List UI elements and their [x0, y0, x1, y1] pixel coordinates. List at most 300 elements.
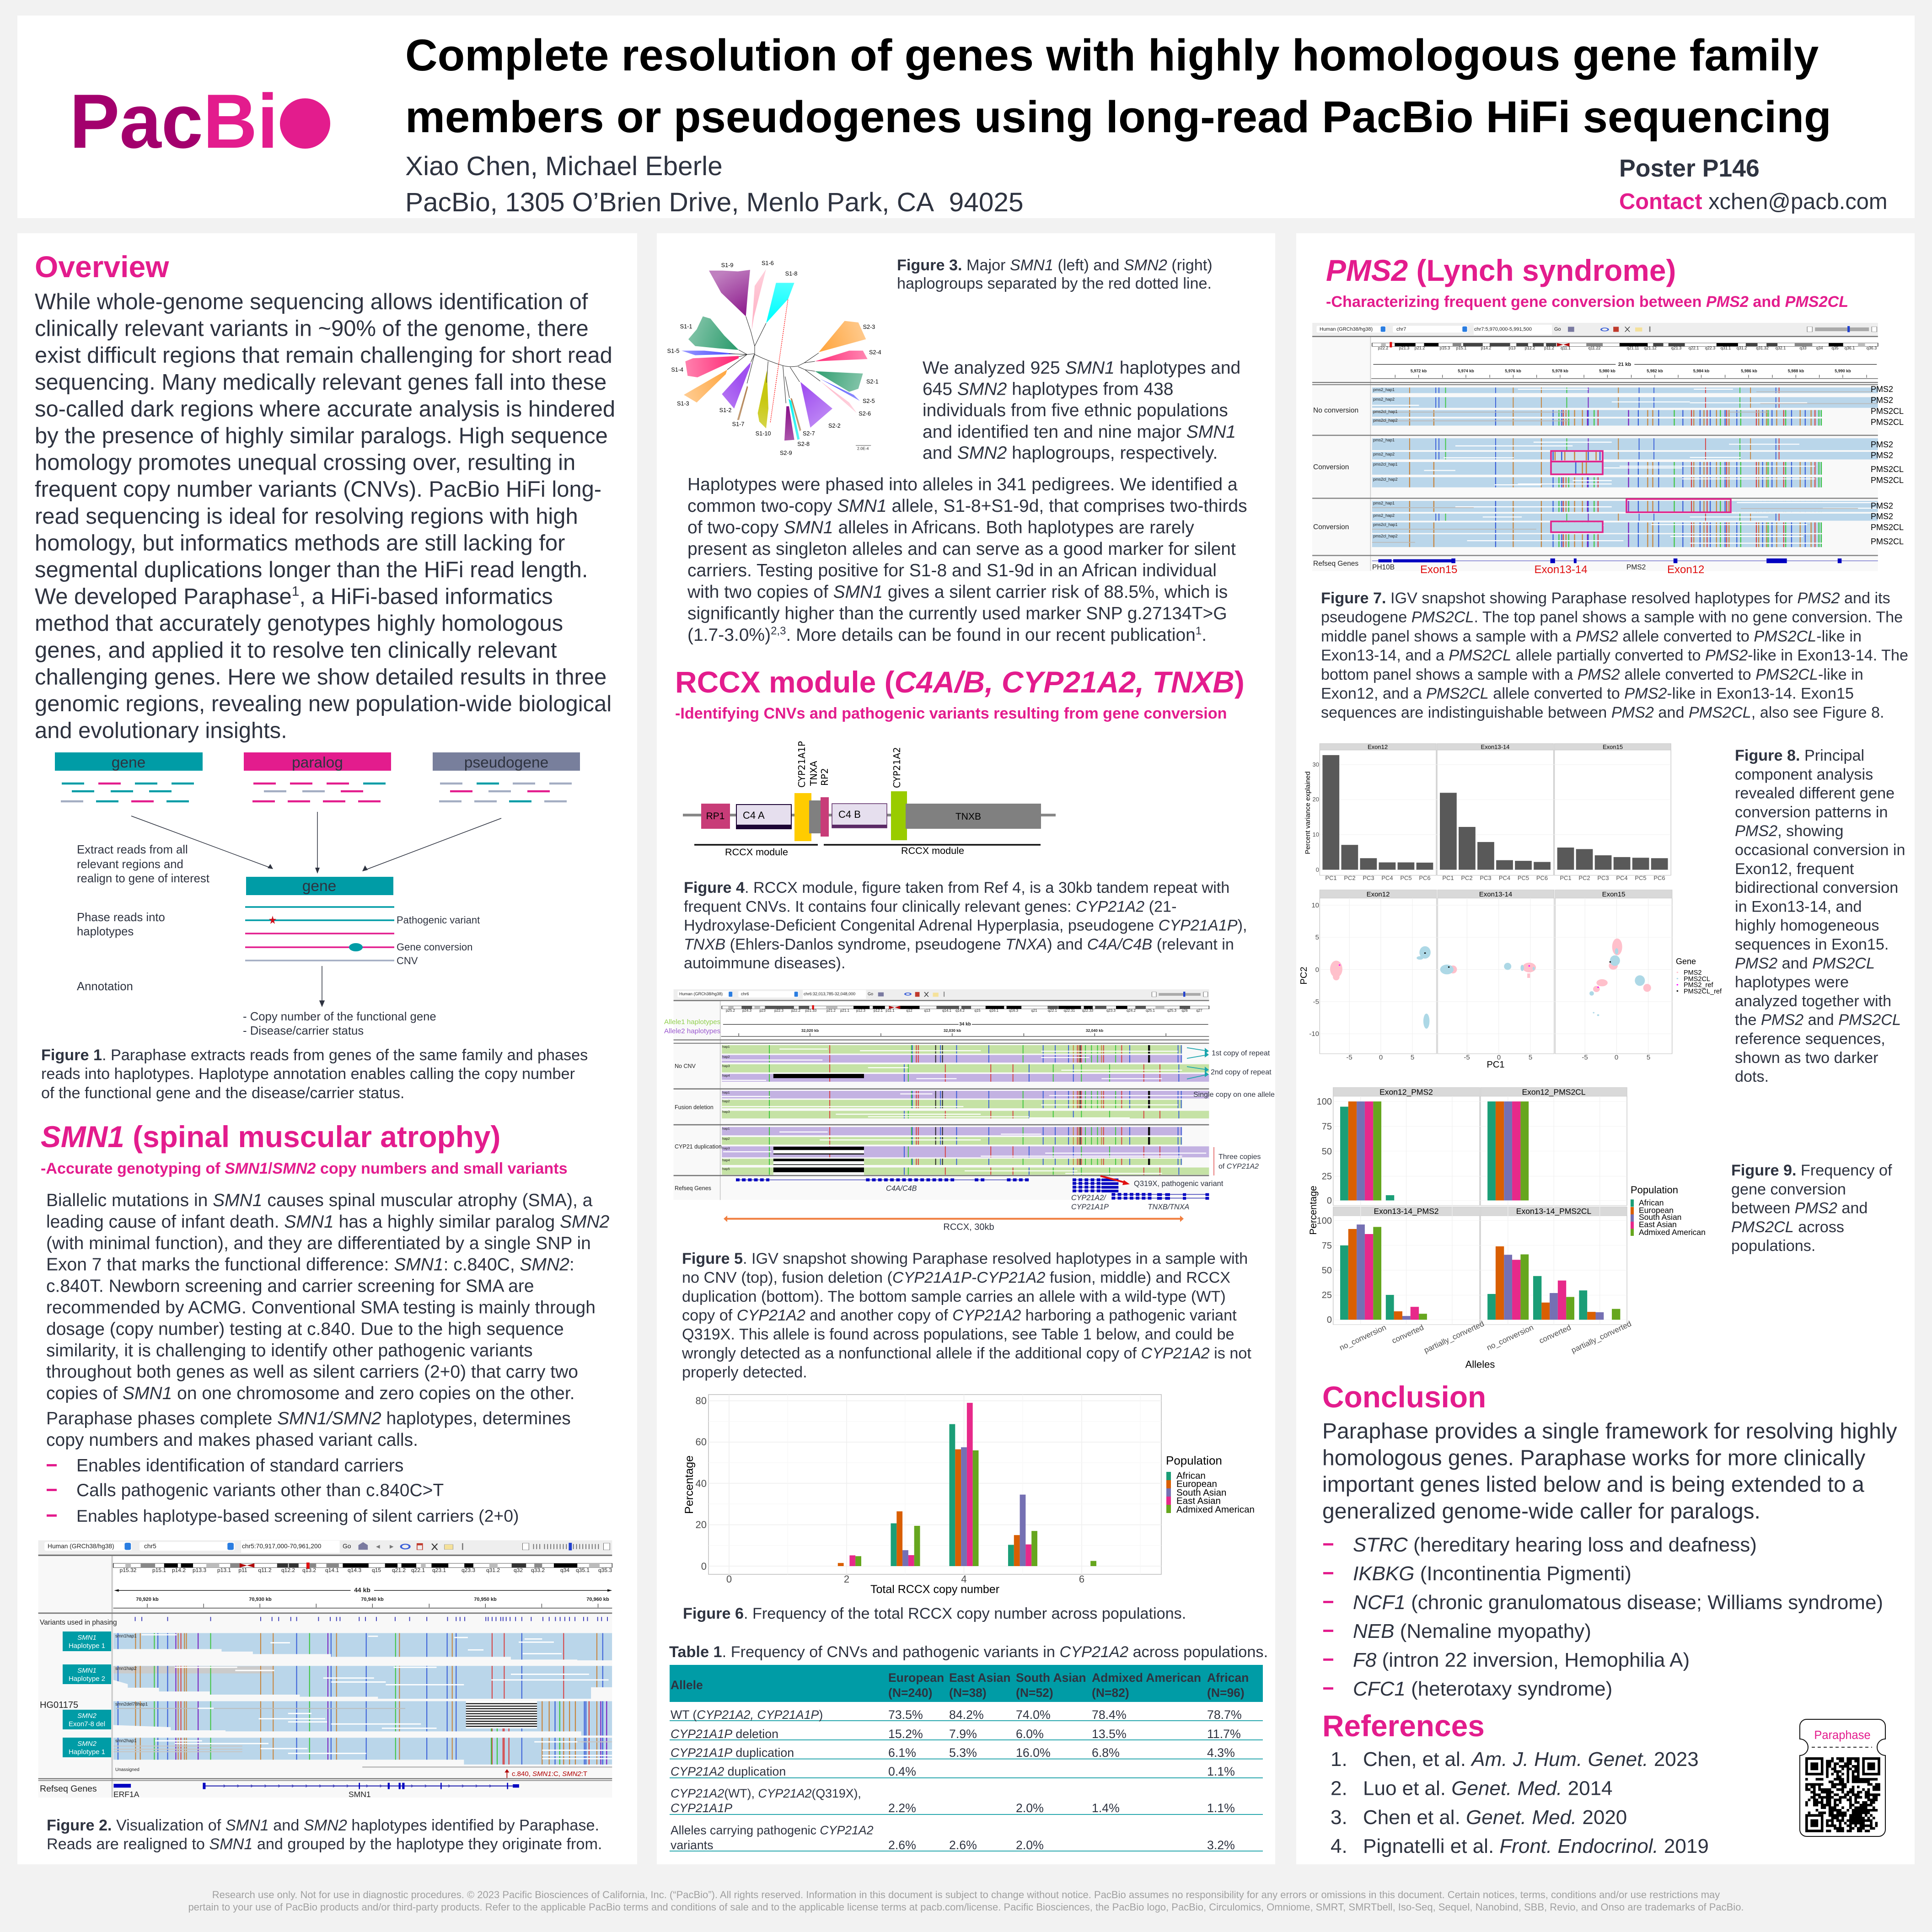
- IGV labels: pms2_hap2: [1373, 452, 1395, 456]
- figure 8 caption: the PMS2 and PMS2CL: [1735, 1011, 1901, 1029]
- text: overview: sequencing. Many medically relevant genes fall into these: [35, 370, 606, 395]
- IGV labels: 32,040 kb: [1086, 1028, 1103, 1033]
- IGV labels: 70,930 kb: [249, 1597, 272, 1602]
- legend: South Asian: [1176, 1487, 1226, 1498]
- PCA axis labels: -10: [1309, 1030, 1319, 1038]
- y tick labels: 25: [1322, 1290, 1332, 1300]
- figure 8 caption: conversion patterns in: [1735, 804, 1888, 821]
- icon: star pathogenic variant: [269, 916, 276, 924]
- bottom right bars: [1487, 1246, 1620, 1320]
- IGV labels: q31.1: [1721, 346, 1731, 350]
- variance axis labels: PC2: [1578, 875, 1590, 881]
- panel: middle column: [657, 233, 1275, 1864]
- figure 8 caption: Figure 8. Principal: [1735, 747, 1864, 764]
- top left bars: [1340, 1101, 1394, 1201]
- IGV labels: chr5: [144, 1543, 156, 1550]
- text: haplotypes analyzed: 645 SMN2 haplotypes from 438: [923, 380, 1173, 399]
- figure 8: principal component analysis: 0: [1379, 1054, 1383, 1061]
- IGV labels: No CNV: [675, 1063, 696, 1069]
- annotation arrows: [724, 1048, 1214, 1222]
- sample tags: SMN2: [77, 1712, 97, 1720]
- figure 8 caption: sequences in Exon15.: [1735, 936, 1889, 953]
- x tick labels: converted: [1390, 1323, 1425, 1345]
- table 1 caption: Table 1. Frequency of CNVs and pathogenic variants in CYP21A2 across populations.: [669, 1643, 1268, 1661]
- x tick labels: partially_converted: [1570, 1319, 1633, 1355]
- subheading: PMS2: -Characterizing frequent gene conversion between PMS2 and PMS2CL: [1326, 293, 1848, 311]
- table rows: 1.4%: [1092, 1801, 1120, 1815]
- tree labels: S2-2: [828, 423, 841, 429]
- figure 8: principal component analysis: -5: [1346, 1054, 1352, 1061]
- gene: RP1: [701, 804, 730, 829]
- heading: References: References: [1322, 1709, 1485, 1743]
- IGV labels: hap5: [722, 1167, 730, 1171]
- figure 6: RCCX copy number bar chart: [683, 1395, 1255, 1596]
- text: overview: homology promotes unequal crossing over, resulting in: [35, 451, 575, 475]
- IGV labels: q32: [514, 1567, 523, 1573]
- IGV labels: Human (GRCh38/hg38): [48, 1543, 114, 1550]
- IGV labels: p15.3: [1440, 346, 1450, 350]
- IGV labels: q23.1: [432, 1567, 446, 1573]
- IGV labels: C4A/C4B: [886, 1185, 917, 1193]
- IGV labels: 5,988 kb: [1788, 369, 1804, 373]
- subheading: RCCX: -Identifying CNVs and pathogenic variants resulting from gene conversion: [675, 705, 1227, 722]
- IGV labels: pms2cl_hap1: [1373, 409, 1398, 414]
- text: SMN1 body: Paraphase phases complete SMN1/SMN2 haplotypes, determines: [46, 1409, 571, 1428]
- IGV labels: q21.3: [1671, 346, 1681, 350]
- legend: Admixed American: [1176, 1504, 1255, 1515]
- IGV labels: p11.1: [886, 1009, 895, 1013]
- text: phased alleles: (1.7-3.0%): [687, 625, 1207, 645]
- QR ticket: Paraphase: Paraphase: [1814, 1729, 1871, 1742]
- gene box realigned: [246, 877, 393, 895]
- IGV labels: q11.22: [1589, 346, 1600, 350]
- legend: gene: [1676, 957, 1722, 995]
- IGV labels: q14.1: [942, 1009, 952, 1013]
- QR ticket: Paraphase: [1800, 1719, 1885, 1836]
- sample tags: SMN1: [77, 1667, 97, 1674]
- figure 8 caption: dots.: [1735, 1068, 1769, 1085]
- IGV labels: Variants used in phasing: [40, 1619, 117, 1626]
- table rows: CYP21A2(WT), CYP21A2(Q319X),: [671, 1787, 861, 1800]
- bars: [838, 1403, 1096, 1566]
- IGV labels: q22.1: [1048, 1009, 1057, 1013]
- IGV labels: q22.1: [1689, 346, 1699, 350]
- figure 5 caption: properly detected.: [682, 1363, 807, 1381]
- table rows: 0.4%: [888, 1765, 916, 1778]
- table rows: 1.1%: [1207, 1765, 1235, 1778]
- x tick labels: [1338, 1319, 1633, 1355]
- tree labels: S2-3: [863, 324, 875, 330]
- IGV labels: p22.3: [774, 1009, 784, 1013]
- figure 8 caption: PMS2, showing: [1735, 822, 1844, 840]
- table rows: 13.5%: [1092, 1727, 1127, 1741]
- gene box realigned: gene: [302, 878, 336, 895]
- IGV labels: p12.3: [856, 1009, 866, 1013]
- IGV labels: q25.1: [1146, 1009, 1155, 1013]
- IGV labels: q22.3: [1705, 346, 1715, 350]
- figure 8 caption: PMS2 and PMS2CL: [1735, 955, 1875, 972]
- variance axis labels: PC5: [1518, 875, 1529, 881]
- figure 4 caption: Figure 4. RCCX module, figure taken from Ref 4, is a 30kb tandem repeat with: [684, 879, 1229, 896]
- IGV labels: q32.1: [1776, 346, 1786, 350]
- PCA axis labels: -5: [1313, 998, 1319, 1006]
- gene: C4 B: [832, 804, 887, 828]
- axis ticks: 60: [696, 1436, 707, 1448]
- IGV labels: p13.1: [217, 1567, 231, 1573]
- figure 8: principal component analysis: Exon12: [1367, 891, 1390, 898]
- IGV labels: [1313, 327, 1904, 576]
- figure 7 caption: sequences are indistinguishable between PMS2 and PMS2CL, also see Figure 8.: [1321, 704, 1884, 721]
- text: references: Pignatelli et al. Front. Endocrinol. 2019: [1363, 1835, 1709, 1857]
- variance axis labels: PC4: [1499, 875, 1510, 881]
- arrows to gene: [131, 812, 501, 874]
- variance axis labels: PC1: [1560, 875, 1572, 881]
- IGV labels: 70,920 kb: [136, 1597, 159, 1602]
- text: conclusion: homologous genes. Paraphase works for more clinically: [1322, 1446, 1865, 1470]
- table rows: 78.7%: [1207, 1708, 1242, 1722]
- text: references: 2.: [1331, 1777, 1347, 1799]
- figure 9 caption: PMS2CL across: [1731, 1218, 1844, 1236]
- module labels: RCCX module: [901, 845, 964, 856]
- tree labels: S1-10: [756, 430, 771, 437]
- variance axis labels: PC2: [1461, 875, 1473, 881]
- text: SMN1 body: copy numbers and makes phased variant calls.: [46, 1430, 418, 1450]
- scale bar: 2.0E-4: [857, 446, 869, 451]
- IGV labels: q21.11: [1627, 346, 1639, 350]
- module labels: RCCX module: [725, 846, 788, 858]
- CYP21 duplication reads: [722, 1127, 1182, 1135]
- legend: population: Admixed American: [1639, 1228, 1706, 1237]
- gene: CYP21A2: [891, 791, 907, 840]
- IGV labels: TNXB/TNXA: [1148, 1203, 1189, 1211]
- IGV labels: q26: [1181, 1009, 1188, 1013]
- figure 5: IGV snapshot RCCX: [664, 989, 1275, 1232]
- legend: East Asian: [1176, 1496, 1221, 1506]
- bullets: SMN1: [47, 1456, 519, 1525]
- text: phased alleles: Haplotypes were phased into alleles in 341 pedigrees. We identified a: [687, 475, 1238, 494]
- IGV labels: Allele2 haplotypes: [664, 1027, 721, 1035]
- IGV labels: q23.3: [462, 1567, 475, 1573]
- step labels: realign to gene of interest: [77, 872, 209, 885]
- IGV labels: Unassigned: [115, 1767, 140, 1772]
- step labels: Annotation: [77, 980, 133, 993]
- tree labels: S1-7: [732, 421, 744, 427]
- authors and address: PacBio, 1305 O’Brien Drive, Menlo Park, CA 94025: [405, 188, 1024, 217]
- strip labels: Exon13-14_PMS2CL: [1516, 1207, 1591, 1216]
- IGV labels: 5,978 kb: [1552, 369, 1568, 373]
- table rows: [670, 1708, 1263, 1852]
- y tick labels: 0: [1327, 1196, 1332, 1206]
- text: references: Chen, et al. Am. J. Hum. Genet. 2023: [1363, 1748, 1699, 1771]
- IGV labels: pms2cl_hap2: [1373, 534, 1398, 538]
- IGV labels: p21.3: [1399, 346, 1409, 350]
- table rows: 3.2%: [1207, 1838, 1235, 1852]
- x tick labels: partially_converted: [1422, 1319, 1486, 1355]
- IGV labels: of CYP21A2: [1218, 1163, 1259, 1170]
- y tick labels: 0: [1327, 1315, 1332, 1325]
- figure 8: principal component analysis: 10: [1313, 831, 1319, 838]
- conversion highlight boxes: [1551, 451, 1731, 532]
- IGV labels: q12: [906, 1009, 912, 1013]
- icon: gene conversion dot: [349, 943, 363, 951]
- table rows: 2.6%: [888, 1838, 916, 1852]
- figure 8: principal component analysis: 0: [1615, 1054, 1618, 1061]
- figure 8 caption: haplotypes were: [1735, 974, 1849, 991]
- IGV labels: Single copy on one allele: [1193, 1091, 1275, 1099]
- text: overview: genes, and applied it to resolve ten clinically relevant: [35, 638, 557, 663]
- text: SMN1 body: Exon 7 that marks the functional difference: SMN1: c.840C, SMN2:: [46, 1255, 574, 1275]
- text: overview: homology, but informatics methods are still lacking for: [35, 531, 565, 555]
- x tick labels: no_conversion: [1485, 1323, 1535, 1352]
- text: haplotypes analyzed: and identified ten and nine major SMN1: [923, 422, 1236, 442]
- gene box: [55, 752, 203, 771]
- IGV labels: p23: [759, 1009, 766, 1013]
- step labels: haplotypes: [77, 925, 134, 938]
- figure 5 caption: Figure 5. IGV snapshot showing Paraphase resolved haplotypes in a sample with: [682, 1250, 1248, 1267]
- strip labels: Exon12_PMS2: [1379, 1088, 1433, 1097]
- IGV labels: p21.1: [840, 1009, 850, 1013]
- figure 8: principal component analysis: 5: [1647, 1054, 1650, 1061]
- IGV labels: [40, 1543, 612, 1799]
- IGV labels: smn2hap1: [115, 1739, 137, 1744]
- IGV labels: Refseq Genes: [1313, 560, 1358, 568]
- IGV labels: RCCX, 30kb: [943, 1222, 994, 1232]
- group 1: [1372, 387, 1878, 393]
- bullets: genes: NCF1 (chronic granulomatous disease; Williams syndrome): [1353, 1591, 1883, 1614]
- gene: RP1: RP1: [706, 811, 724, 821]
- figure 2 caption: Figure 2. Visualization of SMN1 and SMN2 haplotypes identified by Paraphase.: [47, 1817, 599, 1834]
- gene: RP2: [821, 797, 829, 837]
- IGV labels: p11.2: [1544, 346, 1554, 350]
- table rows: 73.5%: [888, 1708, 923, 1722]
- variance axis labels: PC3: [1597, 875, 1609, 881]
- IGV labels: q33: [1799, 346, 1807, 350]
- axis ticks: 0: [701, 1561, 707, 1572]
- bullets: genes: CFC1 (heterotaxy syndrome): [1353, 1678, 1612, 1700]
- IGV labels: PMS2: [1871, 501, 1893, 510]
- IGV labels: p22.2: [1378, 346, 1388, 350]
- IGV labels: Allele1 haplotypes: [664, 1018, 721, 1026]
- IGV labels: PH10B: [1372, 564, 1395, 571]
- text: SMN1 body: throughout both genes as well as silent carriers (2+0) that carry two: [46, 1362, 578, 1382]
- IGV labels: ERF1A: [113, 1790, 140, 1799]
- legend: population: South Asian: [1639, 1213, 1681, 1222]
- text: references: Luo et al. Genet. Med. 2014: [1363, 1777, 1613, 1799]
- legend: gene: PMS2CL_ref: [1684, 988, 1722, 995]
- tree labels: S2-7: [803, 430, 815, 437]
- figure 7 caption: Figure 7. IGV snapshot showing Paraphase resolved haplotypes for PMS2 and its: [1321, 590, 1890, 607]
- rotated gene labels: RP2: [819, 768, 830, 786]
- subheading: SMN1: -Accurate genotyping of SMN1/SMN2 copy numbers and small variants: [41, 1160, 568, 1177]
- text: SMN1 body: (with minimal function), and they are differentiated by a single SNP in: [46, 1234, 591, 1253]
- figure 2: IGV snapshot SMN1 SMN2: [38, 1540, 612, 1799]
- IGV labels: Go: [1554, 327, 1561, 332]
- IGV labels: 5,986 kb: [1741, 369, 1757, 373]
- logo: PacBio: PacBi: [70, 78, 278, 164]
- IGV labels: p11: [238, 1567, 247, 1573]
- IGV labels: 34 kb: [959, 1022, 971, 1027]
- figure 7: IGV snapshot PMS2: [1312, 323, 1904, 576]
- figure 7 caption: Exon13-14, and a PMS2CL allele partially converted to PMS2-like in Exon13-14. The: [1321, 647, 1908, 664]
- IGV labels: 2nd copy of repeat: [1211, 1068, 1272, 1076]
- figure 4: RCCX module diagram: [683, 741, 1056, 858]
- heading: PMS2: PMS2 (Lynch syndrome): [1326, 253, 1676, 287]
- figure 3 caption: Figure 3. Major SMN1 (left) and SMN2 (right): [897, 257, 1213, 274]
- gene: C4 B: C4 B: [838, 809, 861, 820]
- genes: [736, 1180, 1209, 1198]
- IGV labels: p14.2: [172, 1567, 186, 1573]
- IGV labels: q31.32: [1756, 346, 1769, 350]
- text: references: Chen et al. Genet. Med. 2020: [1363, 1806, 1627, 1829]
- IGV labels: q11.2: [258, 1567, 272, 1573]
- IGV labels: Exon12: [1667, 564, 1704, 576]
- text: SMN1 body: c.840T. Newborn screening and carrier screening for SMA are: [46, 1277, 534, 1296]
- text: references: 3.: [1331, 1806, 1347, 1829]
- y tick labels: 100: [1317, 1216, 1332, 1226]
- IGV labels: q12.2: [281, 1567, 295, 1573]
- tree labels: S2-6: [859, 410, 871, 417]
- step labels: Extract reads from all: [77, 843, 188, 856]
- tree labels: S2-4: [869, 349, 881, 356]
- table header: African: [1207, 1671, 1249, 1685]
- figure 8: principal component analysis: PC1: [1487, 1060, 1504, 1070]
- tree branches: [727, 317, 820, 403]
- IGV labels: smn1hap2: [115, 1666, 137, 1671]
- IGV labels: smn1hap1: [115, 1634, 137, 1639]
- IGV labels: SMN1: [349, 1790, 371, 1799]
- table rows: 11.7%: [1207, 1727, 1241, 1741]
- figure 8 caption: Exon12, frequent: [1735, 860, 1854, 878]
- IGV labels: c.840, SMN1:C, SMN2:T: [512, 1770, 587, 1778]
- figure 9: gene conversion frequency bars: [1308, 1088, 1706, 1370]
- IGV labels: p14.2: [1481, 346, 1491, 350]
- text: phased alleles: common two-copy SMN1 allele, S1-8+S1-9d, that comprises two-thirds: [687, 496, 1247, 516]
- figure 8: principal component analysis: 5: [1529, 1054, 1532, 1061]
- IGV labels: 5,982 kb: [1647, 369, 1663, 373]
- IGV labels: Refseq Genes: [40, 1784, 97, 1794]
- IGV labels: q35: [1831, 346, 1839, 350]
- text: phased alleles: carriers. Testing positive for S1-8 and S1-9d in an African individual: [687, 561, 1217, 580]
- text: overview: segmental duplications longer than the HiFi read length.: [35, 558, 588, 582]
- authors and address: Xiao Chen, Michael Eberle: [405, 151, 723, 181]
- figure 4 caption: autoimmune diseases).: [684, 955, 845, 972]
- variance axis labels: PC5: [1635, 875, 1647, 881]
- heading: Overview: Overview: [35, 250, 169, 284]
- text: overview: genomic regions, revealing new population-wide biological: [35, 692, 612, 716]
- tree labels: S1-5: [667, 348, 679, 354]
- table header: European: [888, 1671, 944, 1685]
- sample tags: SMN2: [77, 1740, 97, 1748]
- figure 8 caption: reference sequences,: [1735, 1030, 1885, 1047]
- panel: left column: [17, 233, 637, 1864]
- legend: European: [1176, 1479, 1217, 1489]
- figure 9 caption: between PMS2 and: [1731, 1200, 1868, 1217]
- IGV labels: hap1: [722, 1045, 730, 1049]
- table rows: 78.4%: [1092, 1708, 1127, 1722]
- IGV labels: q15: [372, 1567, 381, 1573]
- IGV labels: chr5:70,917,000-70,961,200: [242, 1543, 322, 1550]
- variance axis labels: PC6: [1419, 875, 1431, 881]
- sample tags: SMN1: [77, 1634, 97, 1642]
- table header: East Asian: [949, 1671, 1011, 1685]
- IGV labels: q13: [924, 1009, 930, 1013]
- IGV labels: pms2_hap2: [1373, 513, 1395, 518]
- text: overview: method that accurately genotypes highly homologous: [35, 611, 563, 636]
- IGV labels: q14.1: [325, 1567, 339, 1573]
- sample tags: Haplotype 1: [69, 1748, 105, 1756]
- IGV labels: pms2_hap1: [1373, 501, 1395, 505]
- table header: (N=96): [1207, 1686, 1245, 1700]
- sample tags: Haplotype 2: [69, 1675, 105, 1683]
- figure 8: principal component analysis: -5: [1582, 1054, 1588, 1061]
- table rows: 16.0%: [1016, 1746, 1051, 1760]
- IGV labels: PMS2CL: [1871, 465, 1904, 474]
- text: overview: 1: [292, 584, 299, 599]
- paralog box: [244, 752, 391, 771]
- text: overview: and evolutionary insights.: [35, 719, 287, 743]
- IGV labels: q36.1: [1845, 346, 1855, 350]
- gene: C4 A: [736, 805, 791, 829]
- bullets: genes: NEB (Nemaline myopathy): [1353, 1620, 1591, 1642]
- tree labels: S1-3: [677, 401, 689, 407]
- variance axis labels: PC1: [1442, 875, 1454, 881]
- IGV labels: q13.2: [302, 1567, 316, 1573]
- axis ticks: 20: [696, 1519, 707, 1530]
- IGV labels: Human (GRCh38/hg38): [1320, 327, 1373, 332]
- IGV labels: p24.3: [742, 1009, 752, 1013]
- reads: [61, 784, 572, 801]
- figure 8: principal component analysis: Exon15: [1602, 891, 1625, 898]
- table header: (N=52): [1016, 1686, 1053, 1700]
- IGV labels: PMS2CL: [1871, 476, 1904, 485]
- poster number: Poster P146: [1619, 155, 1760, 182]
- module rules: [694, 844, 1041, 846]
- figure 8: principal component analysis: [1299, 744, 1722, 1070]
- bullets: genes: F8 (intron 22 inversion, Hemophilia A): [1353, 1649, 1690, 1671]
- table rows: 6.0%: [1016, 1727, 1044, 1741]
- IGV labels: p21.33: [805, 1009, 817, 1013]
- text: references: 4.: [1331, 1835, 1347, 1857]
- figure 8: principal component analysis: 0: [1316, 866, 1319, 873]
- IGV labels: pms2cl_hap2: [1373, 418, 1398, 423]
- text: overview: frequent copy number variants (CNVs). PacBio HiFi long-: [35, 477, 601, 502]
- IGV labels: CYP21A2/: [1071, 1194, 1106, 1202]
- table rows: 2.0%: [1016, 1801, 1044, 1815]
- legend: Population: [1166, 1454, 1222, 1467]
- variance axis labels: PC3: [1363, 875, 1374, 881]
- IGV labels: hap4: [722, 1073, 730, 1078]
- tree labels: S2-5: [863, 398, 875, 404]
- text: overview: exist difficult regions that remain challenging for short read: [35, 343, 612, 368]
- table rows: variants: [671, 1838, 713, 1852]
- paralog box: paralog: [292, 754, 343, 771]
- panel: header: [17, 16, 1915, 218]
- bullets: genes: STRC (hereditary hearing loss and deafness): [1353, 1534, 1757, 1556]
- group 3: [1372, 501, 1878, 512]
- IGV labels: chr6: [741, 992, 749, 996]
- IGV labels: PMS2CL: [1871, 418, 1904, 427]
- IGV labels: q27: [1196, 1009, 1202, 1013]
- figure 4 caption: frequent CNVs. It contains four clinically relevant genes: CYP21A2 (21-: [684, 898, 1176, 915]
- text: overview: While whole-genome sequencing allows identification of: [35, 290, 588, 314]
- legend: population: East Asian: [1639, 1220, 1677, 1229]
- text: phased alleles: .: [1202, 625, 1207, 645]
- No CNV reads: [722, 1045, 1182, 1054]
- IGV labels: hap4: [722, 1158, 730, 1162]
- table rows: CYP21A1P: [671, 1801, 732, 1815]
- footer disclaimer: pertain to your use of PacBio products and/or third-party products. Refer to the applicable PacBio terms and conditions of sale and to the applicable license terms at pacb.com/license. Pacific Biosciences, the PacBio logo, PacBio, Circulomics, Omniome, SMRT, SMRTbell, Iso-Seq, Sequel, Nanobind, SBB, Revio, and Onso are trademarks of PacBio.: [188, 1901, 1744, 1913]
- group 2: [1372, 438, 1878, 450]
